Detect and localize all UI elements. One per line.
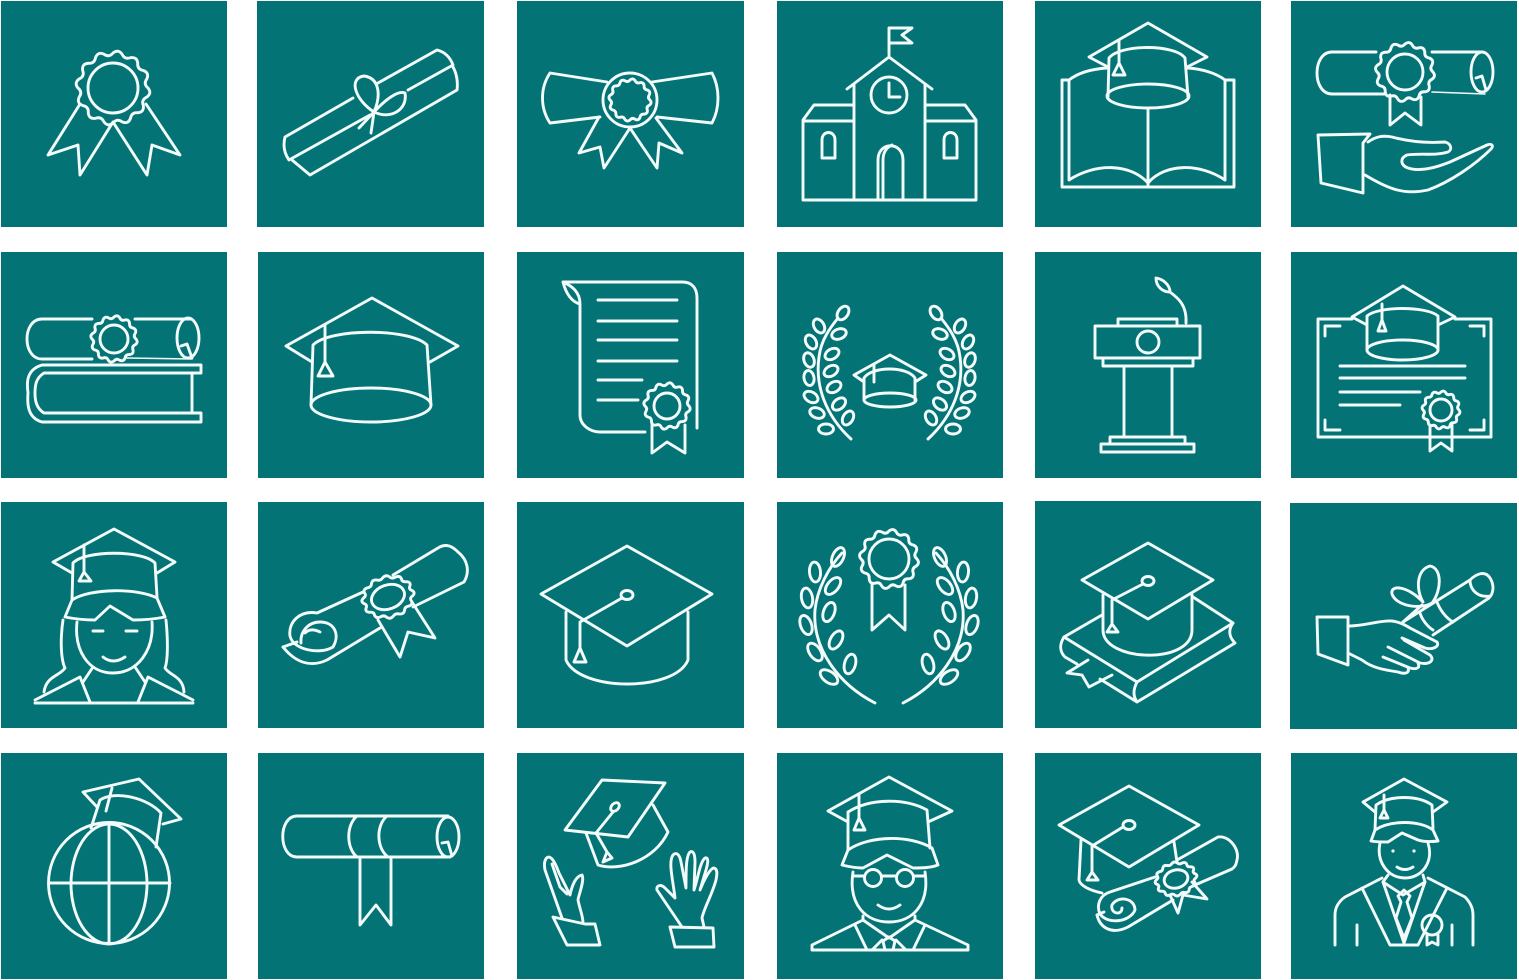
icon: framed certificate — [1318, 286, 1491, 451]
icon: rolled scroll with seal — [283, 545, 467, 664]
panel: diploma with rosette — [517, 1, 744, 227]
panel: tied scroll — [257, 1, 484, 227]
icon: cap above rolled diploma — [1059, 786, 1237, 930]
panel: rosette award — [1, 1, 227, 227]
panel: certificate with cap — [1291, 252, 1517, 478]
panel: laurel and cap — [777, 252, 1003, 478]
icon: isometric cap on book — [1061, 543, 1235, 702]
panel: male graduate in suit — [1291, 753, 1517, 979]
icon: woman in cap — [35, 529, 193, 703]
panel: male graduate with glasses — [777, 753, 1003, 979]
icon: horizontal scroll — [283, 816, 459, 925]
panel: mortarboard angled — [517, 502, 744, 728]
icon: document with seal — [563, 282, 697, 453]
icon: school — [803, 28, 976, 200]
icon: hand holding scroll — [1317, 566, 1493, 673]
icon: graduate with glasses — [812, 777, 968, 950]
panel: female graduate — [1, 502, 227, 728]
icon: laurel wreath and medal — [797, 530, 981, 703]
panel: diploma on book — [1, 252, 227, 478]
panel: open book and cap — [1035, 1, 1261, 227]
icon: laurel wreath with small cap — [802, 304, 977, 439]
panel: certificate scroll — [517, 252, 744, 478]
panel: globe with cap — [1, 753, 227, 979]
panel: hand with scroll — [1290, 503, 1517, 729]
icon: diploma on closed book — [27, 316, 201, 422]
icon: globe and mortarboard — [48, 779, 181, 944]
panel: school building — [777, 1, 1003, 227]
panel: scroll with ribbon — [258, 753, 484, 979]
icon: mortarboard — [286, 298, 458, 422]
icon: scroll with bow — [284, 50, 457, 175]
icon: mortarboard with tassel — [541, 546, 712, 684]
icon: graduate in suit with medal — [1335, 779, 1473, 945]
panel: caps thrown — [517, 753, 744, 979]
icon: diploma seal — [542, 73, 718, 168]
icon: podium with microphone — [1095, 278, 1200, 452]
right branch — [923, 304, 977, 439]
left branch — [797, 546, 875, 703]
panel: lectern — [1035, 252, 1261, 478]
panel: hand receiving diploma — [1291, 1, 1517, 227]
panel: cap and scroll — [1035, 753, 1261, 979]
panel: laurel with medal — [777, 502, 1003, 728]
icon: diploma over hand — [1317, 43, 1493, 193]
panel: mortarboard front — [258, 252, 484, 478]
left branch — [802, 304, 856, 439]
icon: book with cap — [1062, 23, 1234, 187]
panel: cap on book — [1035, 501, 1261, 728]
icon: rosette with ribbons — [48, 51, 180, 175]
panel: rolled diploma — [258, 502, 484, 728]
icon: cap tossed above hands — [544, 780, 717, 947]
right branch — [903, 546, 981, 703]
